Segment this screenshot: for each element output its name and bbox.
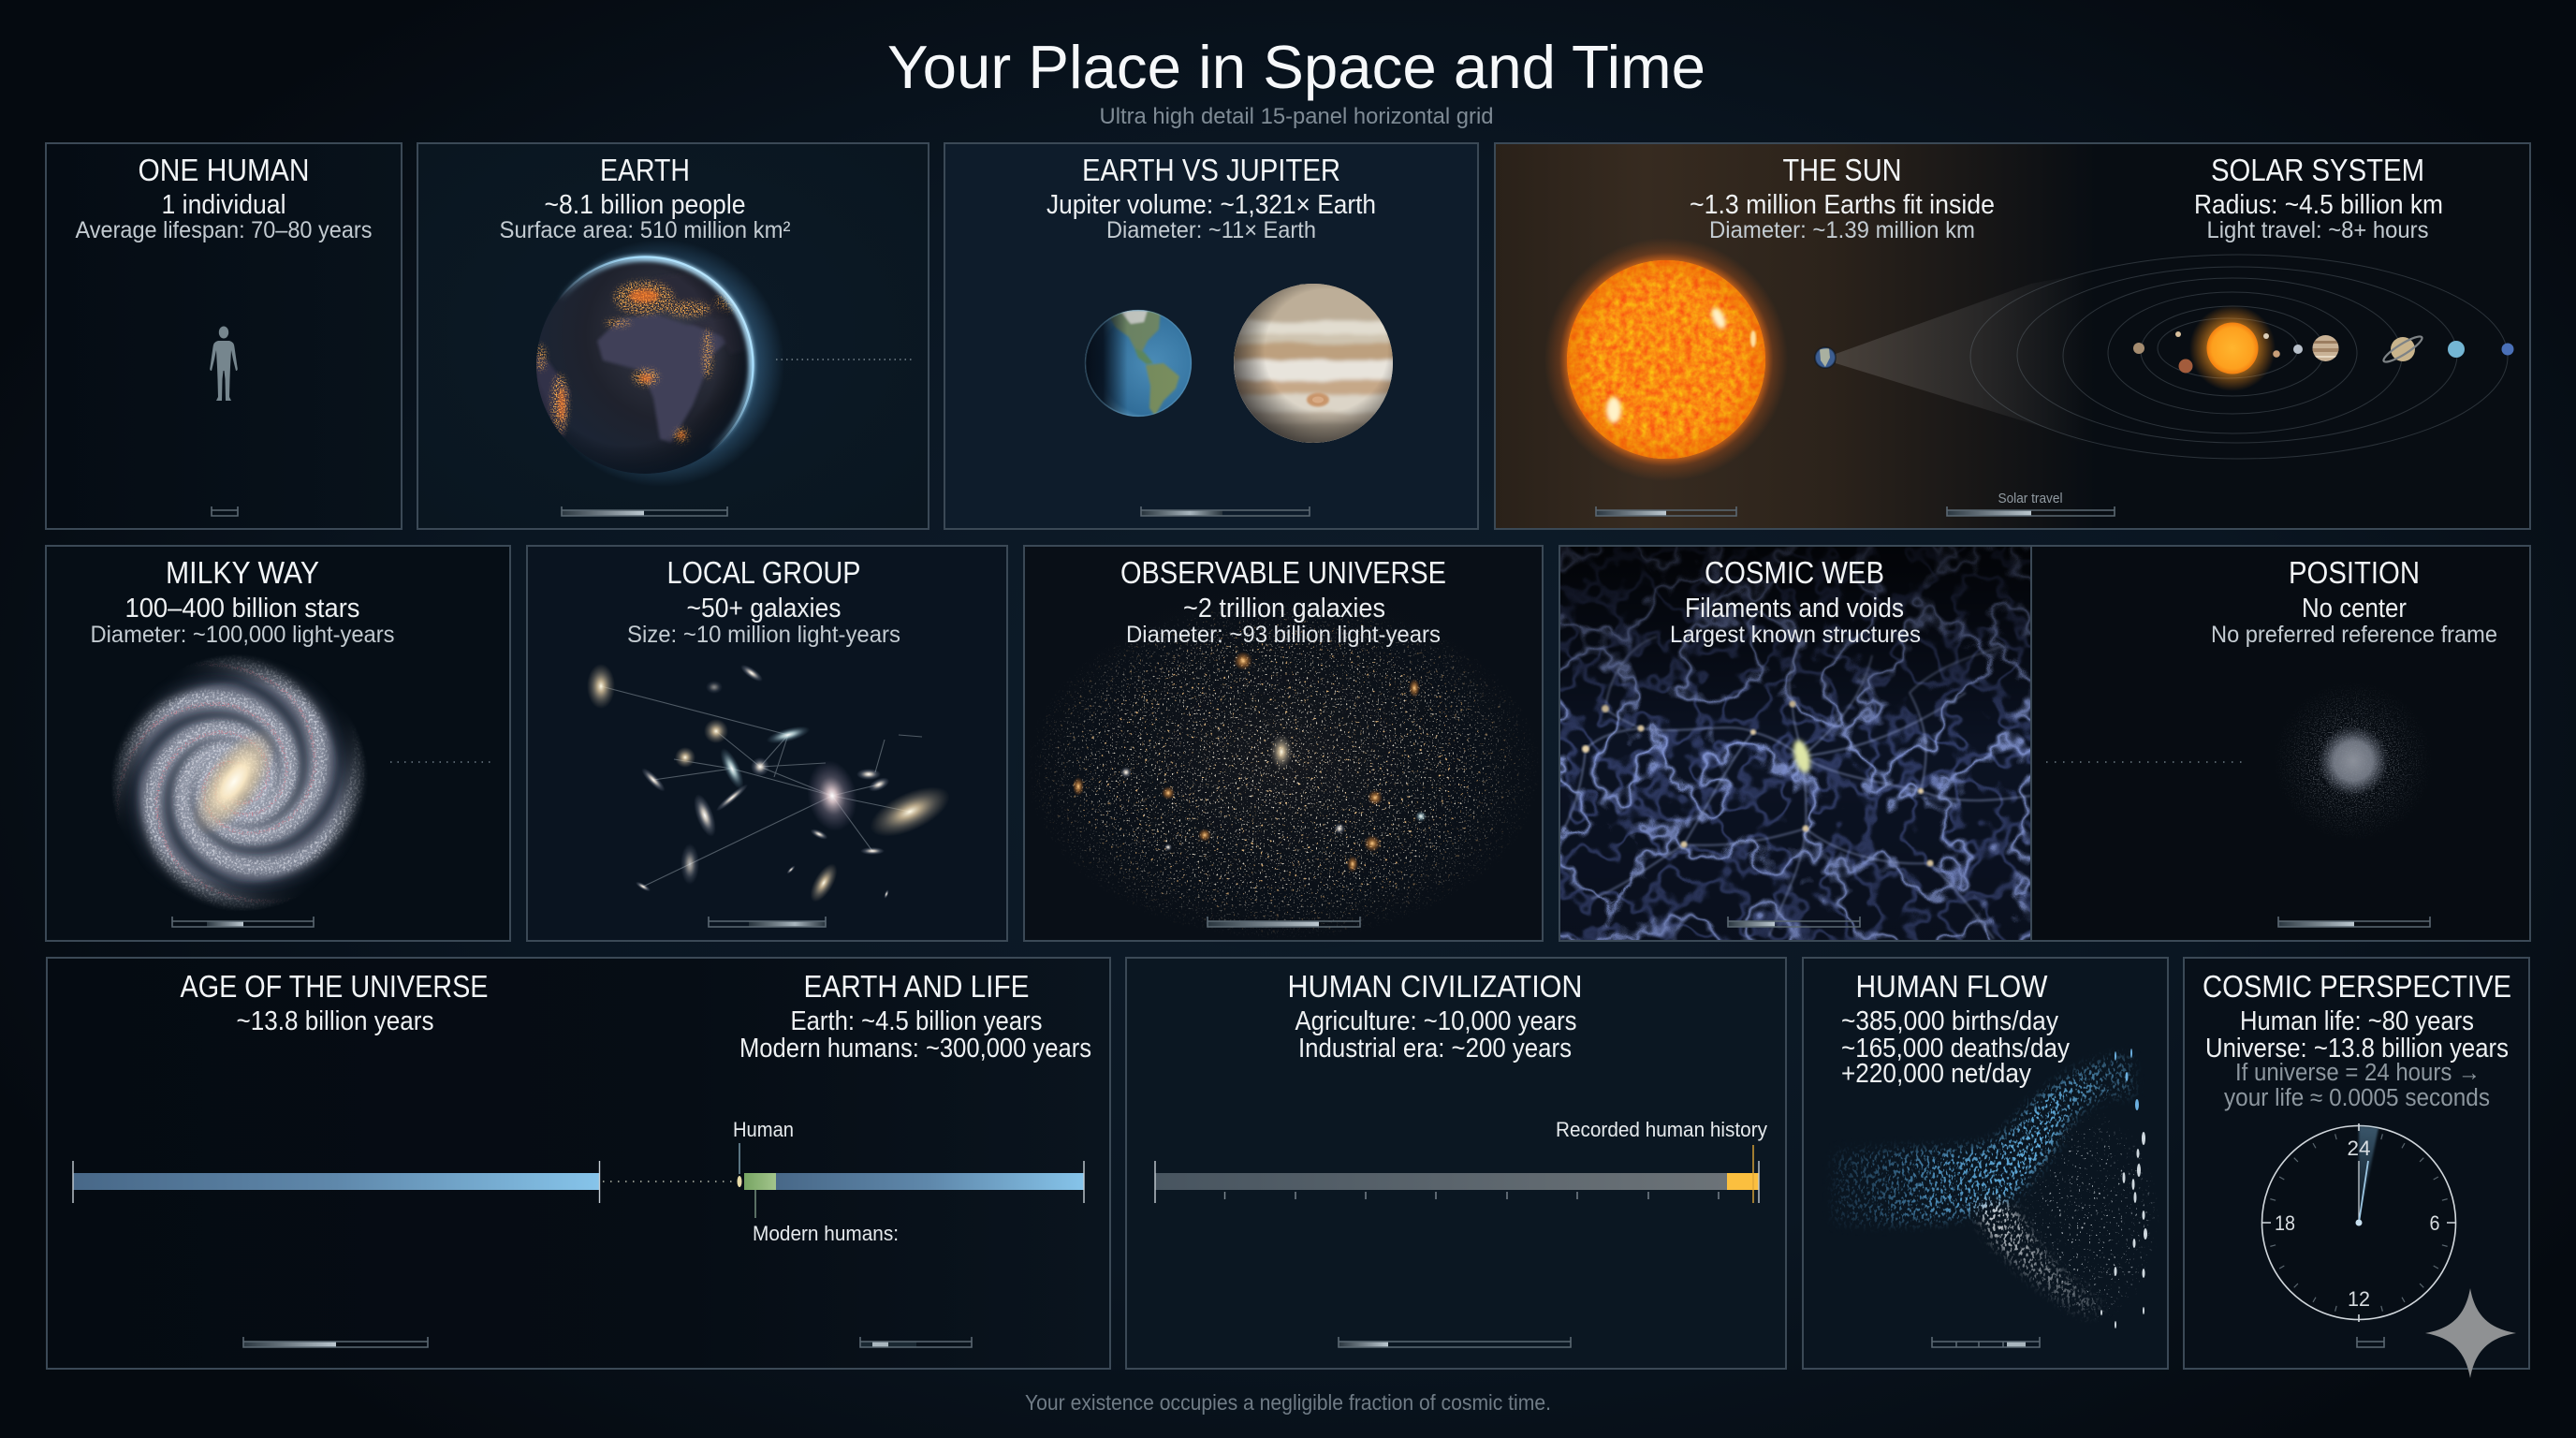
timeline: civilization [1155, 1145, 1759, 1203]
panel: age of the universe and earth and life [47, 958, 1110, 1369]
stat: radius: Radius: ~4.5 billion km [2194, 190, 2443, 220]
stat: agriculture: Agriculture: ~10,000 years [1295, 1006, 1576, 1036]
stat: sun diameter: Diameter: ~1.39 million km [1709, 217, 1975, 243]
scale bar: sun [1596, 506, 1736, 516]
footer caption: Your existence occupies a negligible fraction of cosmic time. [1025, 1390, 1551, 1415]
heading: the sun: THE SUN [1782, 153, 1902, 187]
panel: milky way [46, 546, 510, 965]
marker: human [733, 1118, 794, 1187]
watermark: four-point star [2425, 1288, 2516, 1378]
scale bar [172, 917, 314, 927]
stat: diameter: Diameter: ~93 billion light-years [1126, 622, 1441, 648]
stat: net: +220,000 net/day [1841, 1059, 2032, 1089]
panel: observable universe [1011, 546, 1554, 955]
heading: solar system: SOLAR SYSTEM [2211, 153, 2424, 187]
scale bar [2357, 1337, 2384, 1347]
chart: 24-hour clock: 18 [2275, 1211, 2295, 1235]
illustration: connecting lines [601, 686, 922, 887]
panel: local group [527, 546, 1007, 941]
chart: 24-hour clock: 12 [2348, 1287, 2370, 1311]
panel: one human [46, 143, 402, 529]
stat: diameter: Diameter: ~100,000 light-years [90, 622, 395, 648]
illustration: galaxies [587, 662, 957, 906]
dotted connector [603, 1181, 734, 1182]
stat: universe: Universe: ~13.8 billion years [2205, 1034, 2509, 1064]
dotted scale line [390, 761, 494, 763]
illustration: scale cone from earth to solar system [1836, 271, 2097, 449]
stat: stars: 100–400 billion stars [125, 594, 359, 624]
stat: no center: No center [2302, 594, 2407, 624]
stat: analogy line one: If universe = 24 hours → [2235, 1060, 2481, 1086]
heading: cosmic perspective: COSMIC PERSPECTIVE [2203, 969, 2511, 1004]
heading: milky way: MILKY WAY [166, 555, 319, 590]
subtitle: Ultra high detail 15-panel horizontal grid [1099, 104, 1494, 129]
stat: universe age: ~13.8 billion years [236, 1006, 434, 1036]
title: Your Place in Space and Time [887, 33, 1705, 101]
stat: size: Size: ~10 million light-years [627, 622, 900, 648]
stat: diameter: Diameter: ~11× Earth [1106, 217, 1316, 243]
scale bar [1339, 1337, 1571, 1347]
heading: age of the universe: AGE OF THE UNIVERSE [180, 969, 489, 1004]
divider between cosmic web and position [2030, 547, 2032, 940]
stat: human life: Human life: ~80 years [2240, 1006, 2474, 1036]
heading: cosmic web: COSMIC WEB [1705, 555, 1884, 590]
marker: human: Human [733, 1118, 794, 1141]
chart: 24-hour clock: 6 [2430, 1211, 2439, 1235]
stat: light travel: Light travel: ~8+ hours [2207, 217, 2428, 243]
illustration: jupiter [1217, 271, 1410, 457]
scale bar [709, 917, 826, 927]
stat: analogy line two: your life ≈ 0.0005 seconds [2224, 1085, 2490, 1111]
panel: human civilization [1126, 958, 1786, 1369]
stat: individual: 1 individual [161, 190, 286, 220]
stat: volume: Jupiter volume: ~1,321× Earth [1046, 190, 1376, 220]
stat: lifespan: Average lifespan: 70–80 years [75, 217, 373, 243]
stat: earths inside: ~1.3 million Earths fit inside [1690, 190, 1995, 220]
illustration: orbits [1970, 255, 2508, 459]
stat: filaments: Filaments and voids [1685, 594, 1904, 624]
chart: 24-hour clock [2261, 1123, 2456, 1322]
panel: human flow [1803, 958, 2168, 1369]
panel: earth [417, 143, 929, 529]
scale bar [212, 506, 238, 516]
marker: modern humans: Modern humans: [753, 1222, 899, 1245]
stat: deaths: ~165,000 deaths/day [1841, 1034, 2071, 1064]
stat: earth age: Earth: ~4.5 billion years [790, 1006, 1043, 1036]
heading: position: POSITION [2289, 555, 2420, 590]
panel: cosmic web and position [1559, 546, 2530, 941]
heading: local group: LOCAL GROUP [666, 555, 861, 590]
stat: no preferred frame: No preferred reference frame [2211, 622, 2497, 648]
panel: cosmic perspective [2184, 958, 2529, 1369]
illustration: fuzzy position cloud [2274, 682, 2433, 841]
timeline: universe [73, 1161, 599, 1203]
stat: population: ~8.1 billion people [545, 190, 745, 220]
stat: structures: Largest known structures [1670, 622, 1921, 648]
illustration: solar system sun [2189, 305, 2276, 391]
heading: human flow: HUMAN FLOW [1855, 969, 2048, 1004]
chart: 24-hour clock: 24 [2348, 1137, 2370, 1160]
stat: surface area: Surface area: 510 million km² [500, 217, 790, 243]
scale label: solar travel: Solar travel [1998, 491, 2063, 506]
stat: births: ~385,000 births/day [1841, 1006, 2059, 1036]
stat: modern humans age: Modern humans: ~300,000 years [739, 1034, 1091, 1064]
scale bar [1141, 506, 1310, 516]
illustration: planets [2133, 331, 2514, 373]
illustration: population particle stream [1835, 1049, 2159, 1328]
scale bar [562, 506, 727, 516]
stat: industrial era: Industrial era: ~200 years [1298, 1034, 1572, 1064]
scale bar: cosmic web [1728, 917, 1860, 927]
stat: galaxies: ~2 trillion galaxies [1183, 594, 1385, 624]
heading: earth and life: EARTH AND LIFE [803, 969, 1030, 1004]
heading: observable universe: OBSERVABLE UNIVERSE [1120, 555, 1446, 590]
illustration: sun [1544, 238, 1788, 481]
illustration: spiral galaxy [53, 600, 418, 965]
panel: earth vs jupiter [944, 143, 1478, 529]
dotted scale line [776, 359, 914, 360]
scale bar [1932, 1337, 2040, 1347]
scale bar [1208, 917, 1360, 927]
stat: galaxies: ~50+ galaxies [687, 594, 841, 624]
icon: human silhouette [210, 326, 238, 401]
timeline: earth [744, 1161, 1084, 1203]
heading: one human: ONE HUMAN [139, 153, 309, 187]
illustration: earth [1085, 310, 1192, 417]
illustration: night earth [524, 240, 784, 487]
label: recorded history: Recorded human history [1556, 1118, 1767, 1141]
scale bar: earth and life [860, 1337, 972, 1347]
illustration: tiny earth [1815, 347, 1836, 368]
scale bar: position [2278, 917, 2430, 927]
heading: human civilization: HUMAN CIVILIZATION [1288, 969, 1582, 1004]
heading: earth: EARTH [600, 153, 690, 187]
dotted scale line [2046, 761, 2247, 763]
heading: earth vs jupiter: EARTH VS JUPITER [1082, 153, 1340, 187]
scale bar: age [243, 1337, 428, 1347]
illustration: star field [1011, 562, 1554, 955]
scale bar: solar travel [1947, 506, 2115, 516]
panel: sun and solar system [1495, 143, 2530, 529]
illustration: cosmic web [1560, 547, 2031, 940]
